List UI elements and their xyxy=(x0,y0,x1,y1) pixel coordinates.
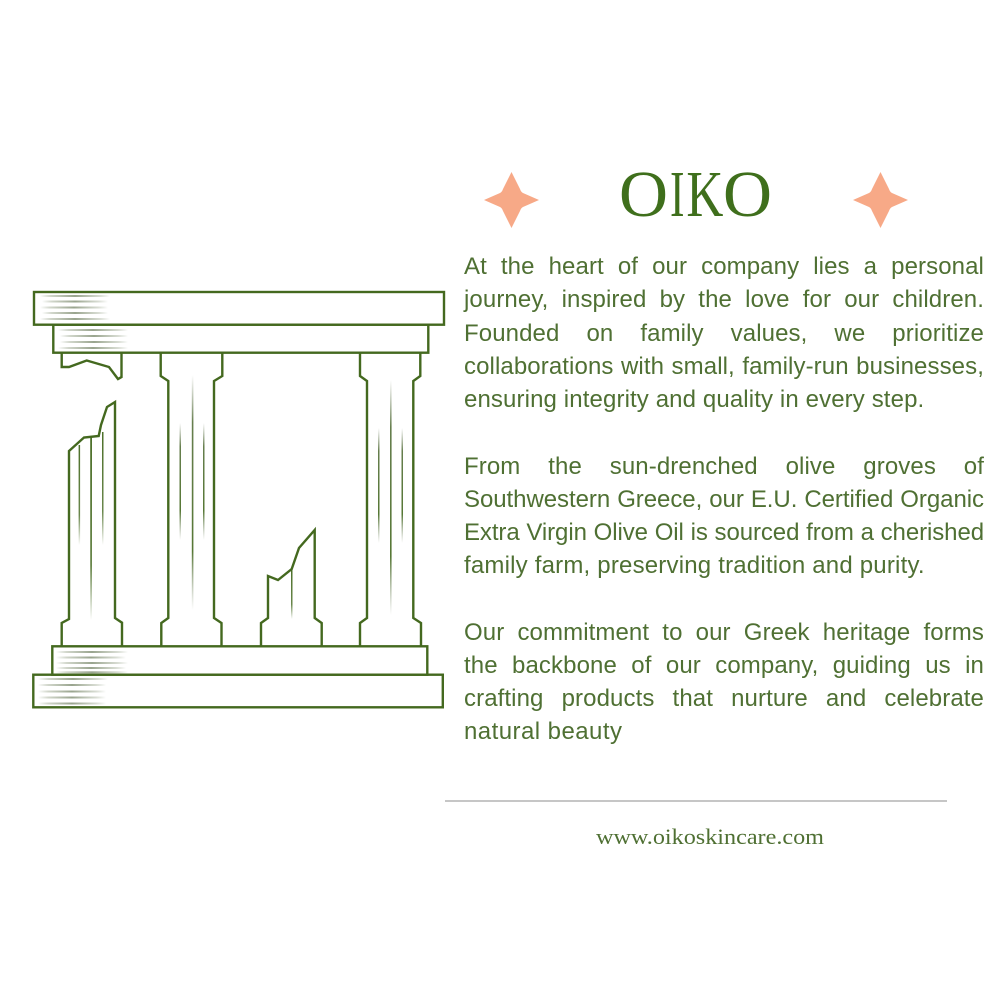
right column xyxy=(360,353,421,646)
text block: olive oil sourcing xyxy=(464,453,984,579)
text block: company story: journey, inspired by the love for our children. xyxy=(464,286,984,313)
text block: company story xyxy=(463,253,984,413)
broken stump column xyxy=(261,530,322,646)
text block: company story: At the heart of our company lies a personal xyxy=(464,253,984,280)
text block: olive oil sourcing: family farm, preserving tradition and purity. xyxy=(464,552,925,579)
text block: Greek heritage: crafting products that nurture and celebrate xyxy=(464,685,984,712)
text block: Greek heritage xyxy=(464,619,984,745)
text block: olive oil sourcing: Southwestern Greece, our E.U. Certified Organic xyxy=(464,486,984,513)
text block: Greek heritage: Our commitment to our Greek heritage forms xyxy=(464,619,984,646)
text block: company story: ensuring integrity and quality in every step. xyxy=(464,386,924,413)
text block: olive oil sourcing: From the sun-drenched olive groves of xyxy=(464,453,984,480)
text block: company story: Founded on family values, we prioritize xyxy=(464,320,984,347)
top slab xyxy=(34,292,444,325)
upper base slab xyxy=(52,646,427,675)
second slab xyxy=(53,325,428,353)
text block: olive oil sourcing: Extra Virgin Olive Oil is sourced from a cherished xyxy=(464,519,984,546)
title xyxy=(619,170,772,230)
broken capital fragment xyxy=(62,353,122,379)
icon: left star xyxy=(484,172,539,228)
left broken column xyxy=(62,402,122,646)
centre column xyxy=(161,353,222,646)
text block: Greek heritage: the backbone of our company, guiding us in xyxy=(464,652,984,679)
divider xyxy=(445,800,947,802)
text block: company story: collaborations with small, family-run businesses, xyxy=(464,353,984,380)
lower base slab xyxy=(33,675,443,707)
icon: right star xyxy=(853,172,908,228)
text block: Greek heritage: natural beauty xyxy=(464,718,622,745)
website url: www.oikoskincare.com xyxy=(596,824,824,849)
